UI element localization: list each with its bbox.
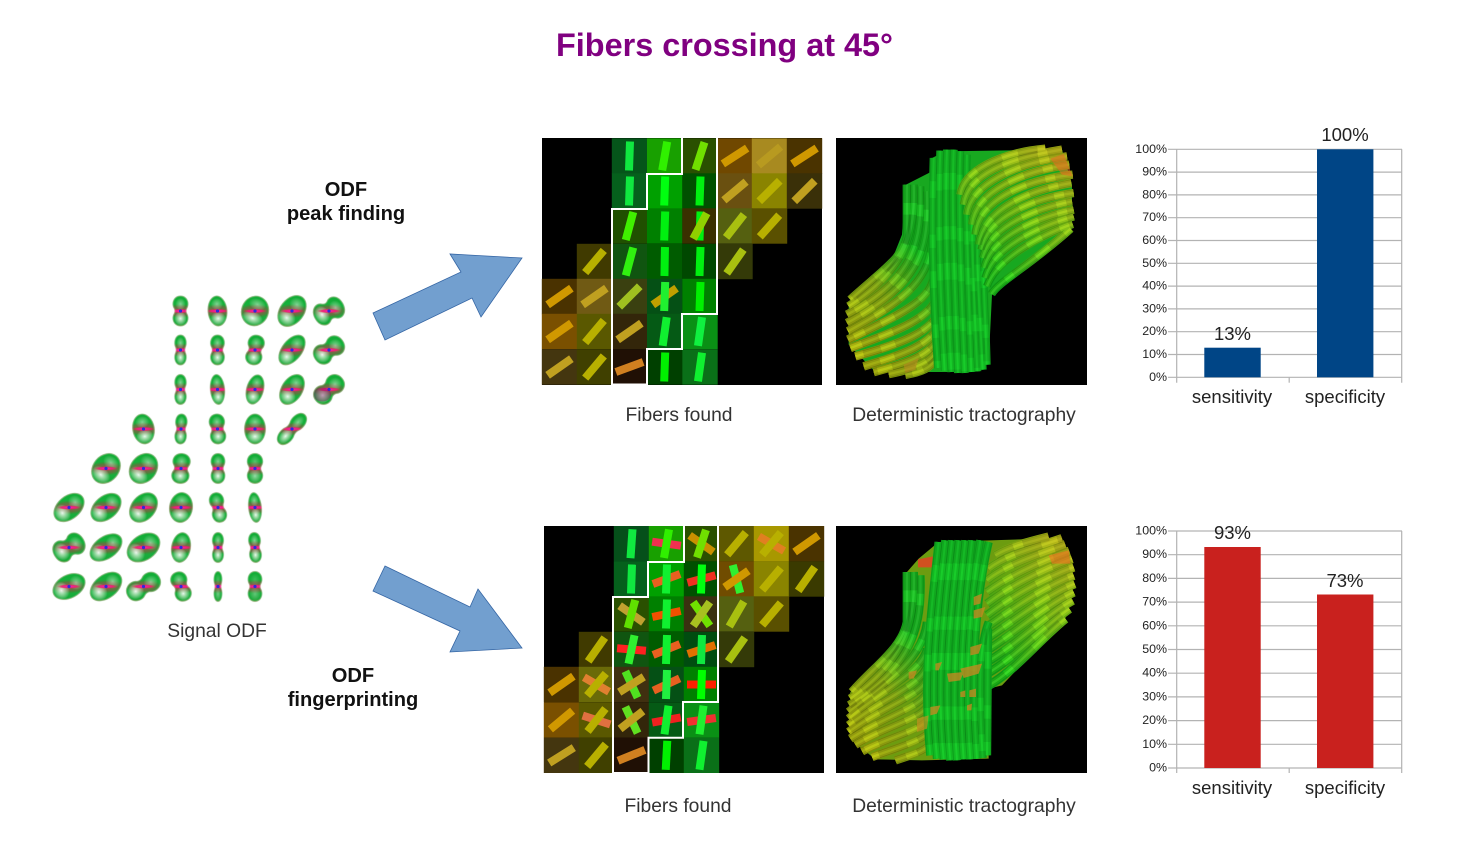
y axis labels: 90% (1142, 547, 1167, 561)
white outline: crossing region (612, 138, 717, 384)
gridlines and axes (1168, 149, 1402, 383)
caption: fibers found, bottom: Fibers found (624, 796, 732, 817)
y axis labels: 30% (1142, 689, 1167, 703)
bar: sensitivity 93%: sensitivity (1192, 777, 1273, 798)
y axis labels: 20% (1142, 324, 1167, 338)
y axis labels: 30% (1142, 301, 1167, 315)
heading: ODF fingerprinting: ODF (332, 665, 374, 687)
bar: sensitivity 93% (1192, 522, 1273, 798)
y axis labels: 80% (1142, 571, 1167, 585)
y axis labels (1135, 524, 1167, 774)
panel: deterministic tractography, bottom (836, 526, 1087, 773)
bar: specificity 73%: specificity (1305, 777, 1386, 798)
panel: signal ODF glyph grid (48, 290, 348, 607)
arrow: to peak finding (373, 254, 522, 340)
bar: sensitivity 13% (1192, 323, 1273, 407)
bar: specificity 100% (1305, 124, 1386, 407)
y axis labels: 90% (1142, 165, 1167, 179)
panel: deterministic tractography, top (836, 138, 1087, 385)
y axis labels: 50% (1142, 256, 1167, 270)
caption: fibers found, top: Fibers found (625, 405, 733, 426)
y axis labels: 40% (1142, 279, 1167, 293)
gridlines and axes (1168, 531, 1402, 773)
heading: ODF peak finding: peak finding (287, 203, 405, 225)
caption: tractography, bottom: Deterministic tractography (852, 796, 1076, 817)
heading: ODF fingerprinting: fingerprinting (288, 689, 418, 711)
y axis labels (1135, 142, 1167, 384)
bar: sensitivity 93%: 93% (1214, 522, 1251, 543)
y axis labels: 60% (1142, 618, 1167, 632)
bar chart: peak finding (1135, 124, 1402, 407)
y axis labels: 80% (1142, 187, 1167, 201)
arrow: to fingerprinting (373, 566, 522, 652)
title: Fibers crossing at 45° (556, 27, 893, 63)
panel: fibers found, peak finding (542, 138, 822, 385)
y axis labels: 100% (1135, 142, 1167, 156)
y axis labels: 60% (1142, 233, 1167, 247)
y axis labels: 70% (1142, 595, 1167, 609)
bar: specificity 100%: specificity (1305, 386, 1386, 407)
y axis labels: 20% (1142, 713, 1167, 727)
y axis labels: 70% (1142, 210, 1167, 224)
panel: fibers found, fingerprinting (544, 526, 824, 773)
bar: specificity 73% (1305, 570, 1386, 798)
caption: tractography, top: Deterministic tractography (852, 405, 1076, 426)
heading: ODF peak finding: ODF (325, 179, 367, 201)
y axis labels: 10% (1142, 737, 1167, 751)
y axis labels: 0% (1149, 760, 1167, 774)
bar: specificity 100%: 100% (1321, 124, 1369, 145)
bar chart: fingerprinting (1135, 522, 1402, 798)
y axis labels: 50% (1142, 642, 1167, 656)
y axis labels: 0% (1149, 370, 1167, 384)
bar: sensitivity 13%: 13% (1214, 323, 1251, 344)
bar: specificity 73%: 73% (1326, 570, 1364, 591)
y axis labels: 100% (1135, 524, 1167, 538)
caption: signal ODF: Signal ODF (167, 621, 267, 642)
y axis labels: 40% (1142, 666, 1167, 680)
white outline: crossing region (613, 526, 718, 773)
bar: sensitivity 13%: sensitivity (1192, 386, 1273, 407)
y axis labels: 10% (1142, 347, 1167, 361)
